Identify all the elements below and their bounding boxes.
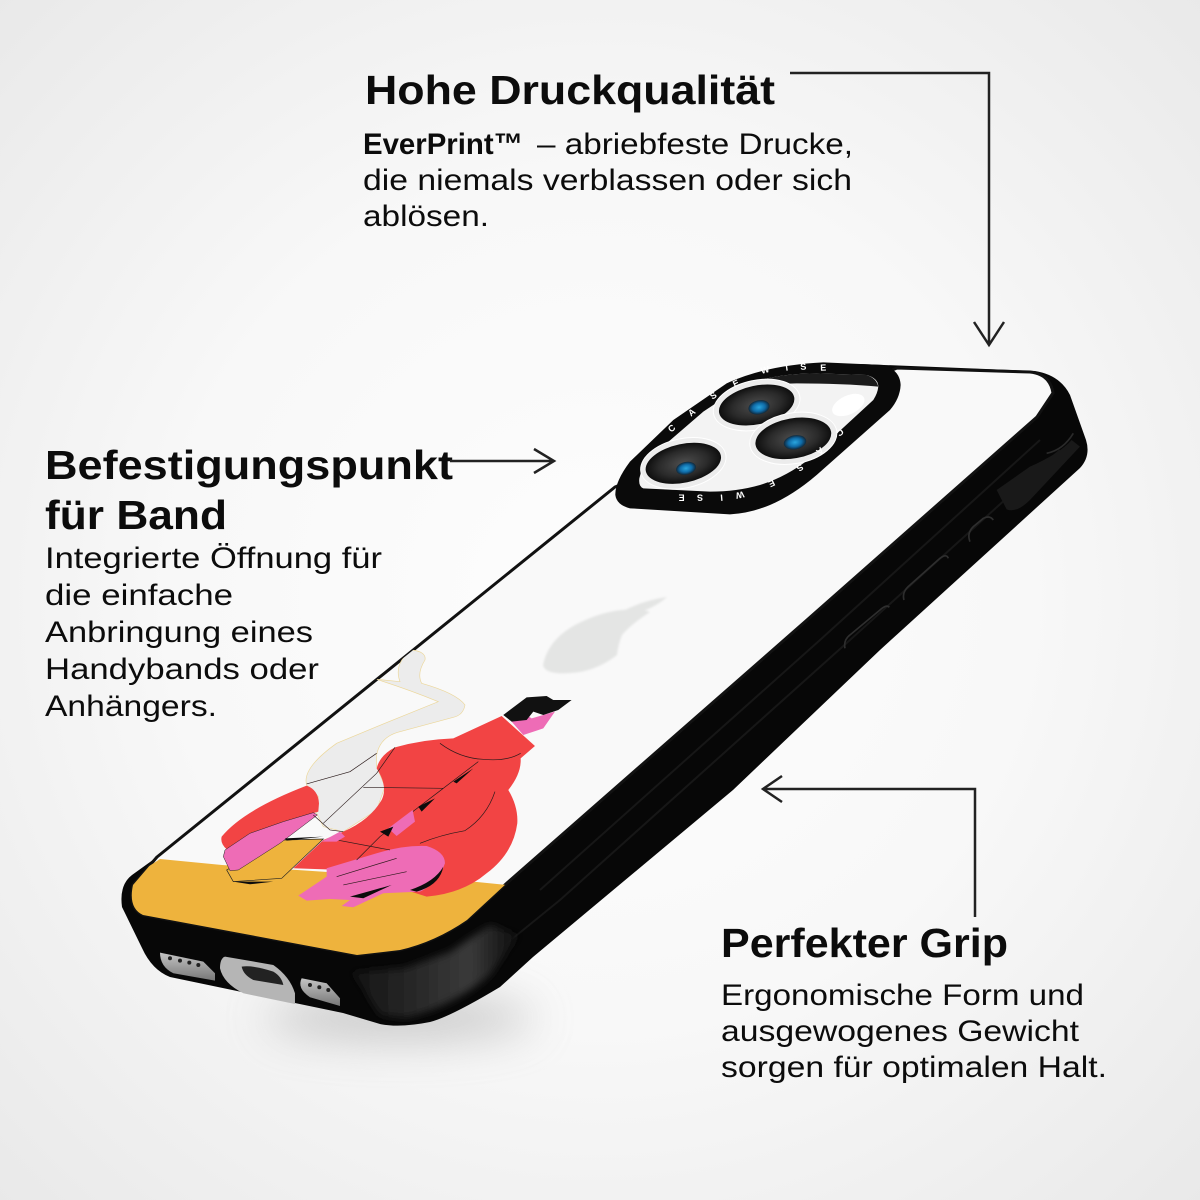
left hand xyxy=(223,813,317,871)
ring lettering: E xyxy=(731,378,741,389)
charging port xyxy=(220,957,295,1004)
ring lettering xyxy=(666,361,846,503)
speaker right xyxy=(300,978,340,1006)
bottom ports xyxy=(160,953,340,1006)
body text: Handybands oder xyxy=(45,653,319,686)
lens: right xyxy=(746,406,841,471)
arrow: strap attachment xyxy=(450,449,554,473)
sweater seam lines xyxy=(307,743,521,885)
heading: Hohe Druckqualität xyxy=(365,67,775,113)
camera ring xyxy=(615,361,901,514)
ring lettering: C xyxy=(834,426,846,439)
ring lettering: E xyxy=(767,478,776,489)
smoke xyxy=(306,650,465,832)
ring lettering: S xyxy=(795,462,805,473)
lower corner highlights xyxy=(352,925,520,1018)
body text: ablösen. xyxy=(363,200,489,233)
ring lettering: E xyxy=(820,363,826,373)
case body xyxy=(121,364,1088,1026)
body text xyxy=(363,128,853,233)
cup xyxy=(227,839,323,882)
ring lettering: S xyxy=(800,361,807,372)
body text: ausgewogenes Gewicht xyxy=(721,1015,1080,1048)
ring lettering: I xyxy=(785,363,789,373)
body text xyxy=(45,542,382,723)
ring lettering: S xyxy=(697,493,703,503)
shadow strokes xyxy=(233,768,473,898)
right hand xyxy=(298,846,445,907)
small hand xyxy=(388,810,415,836)
phone back face xyxy=(132,368,1053,955)
ring lettering: I xyxy=(720,493,723,503)
flash xyxy=(829,389,868,421)
hair xyxy=(503,696,572,722)
heading: für Band xyxy=(45,492,227,538)
body text: EverPrint™ xyxy=(363,128,523,161)
ring frame xyxy=(615,362,901,514)
drop shadow xyxy=(265,996,535,1040)
ring lettering: E xyxy=(679,493,685,503)
side button details xyxy=(845,433,1080,648)
body text: – abriebfeste Drucke, xyxy=(537,128,853,161)
wrist xyxy=(322,832,345,842)
yellow table xyxy=(132,859,506,955)
heading xyxy=(45,442,453,538)
ring lettering: W xyxy=(734,489,745,501)
body text: Integrierte Öffnung für xyxy=(45,542,382,575)
ring window xyxy=(639,373,878,492)
ring lettering: C xyxy=(666,422,678,434)
apple logo xyxy=(543,597,667,673)
ring lettering: A xyxy=(814,445,826,457)
speaker left xyxy=(160,953,215,981)
lens: left xyxy=(636,430,731,496)
artwork: illustration on case xyxy=(120,650,572,965)
neck and face xyxy=(512,712,555,735)
heading: Befestigungspunkt xyxy=(45,442,453,488)
arrow: print quality xyxy=(790,73,1004,345)
phone case xyxy=(120,361,1088,1040)
body text xyxy=(721,979,1107,1084)
body text: Anhängers. xyxy=(45,690,217,723)
ring lettering: S xyxy=(708,390,719,401)
callout: strap attachment xyxy=(45,442,453,723)
body text: die niemals verblassen oder sich xyxy=(363,164,852,197)
body text: sorgen für optimalen Halt. xyxy=(721,1051,1107,1084)
callout: perfect grip xyxy=(721,920,1107,1084)
lens: top xyxy=(708,372,805,438)
side groove lines xyxy=(480,440,1060,965)
body text: Ergonomische Form und xyxy=(721,979,1084,1012)
arrow: perfect grip xyxy=(763,776,975,917)
heading: Perfekter Grip xyxy=(721,920,1008,966)
ring lettering: W xyxy=(760,364,771,376)
sweater sleeve xyxy=(221,786,319,849)
ring lettering: A xyxy=(686,406,698,418)
body in red sweater xyxy=(293,716,535,897)
window top shadow xyxy=(743,373,878,387)
callout: print quality xyxy=(363,67,853,233)
body text: die einfache xyxy=(45,579,233,612)
body text: Anbringung eines xyxy=(45,616,313,649)
